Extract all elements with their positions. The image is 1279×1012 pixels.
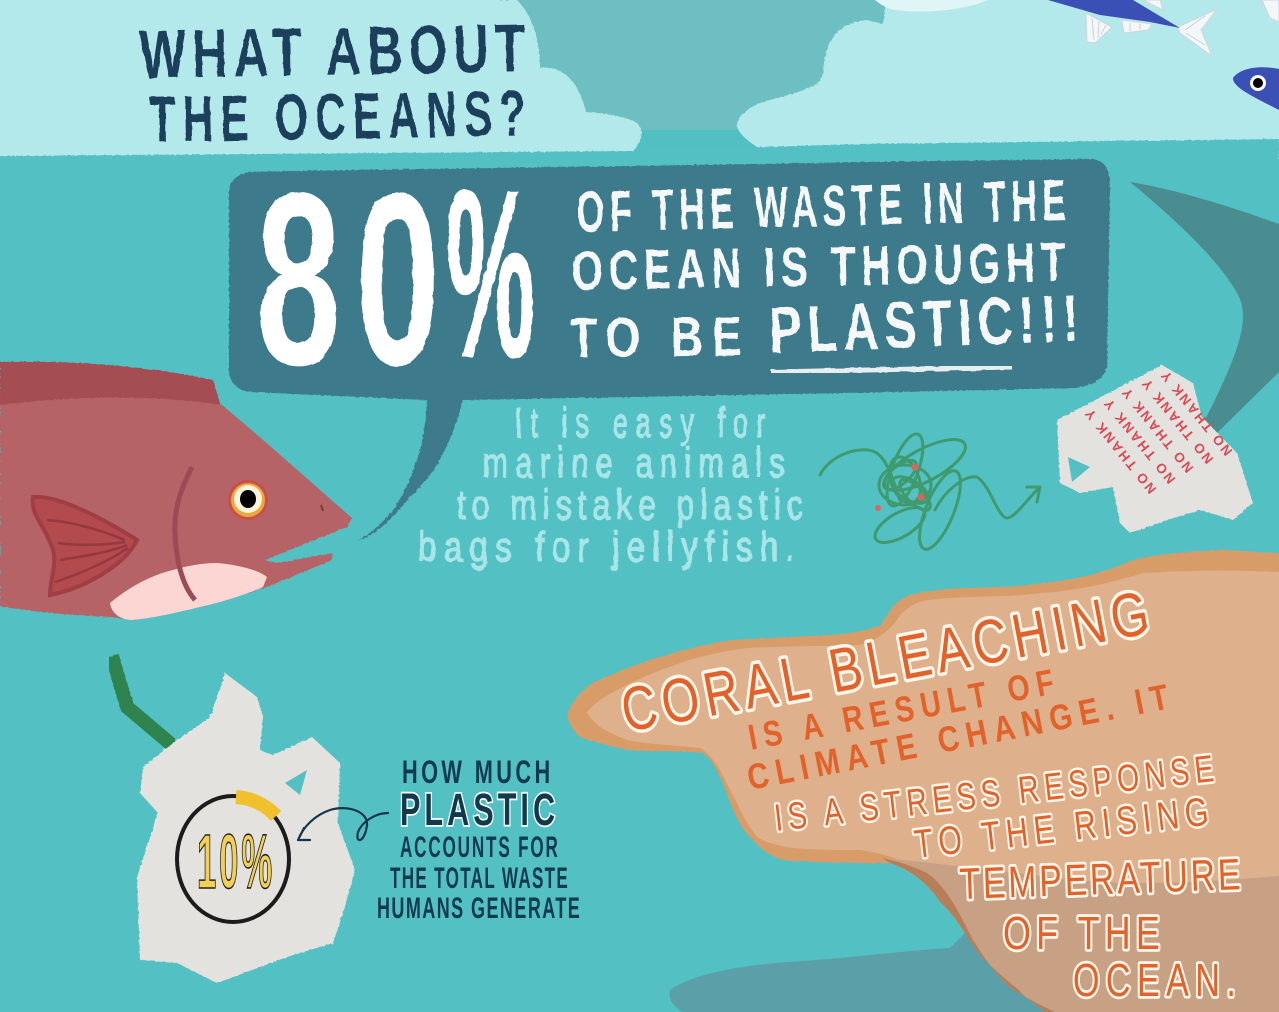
arrow to gauge [298,808,388,840]
gauge ring [177,796,289,922]
underline for plastic [771,367,1012,372]
speech bubble [229,159,1110,541]
icon: plastic bag with no thank you: NO THANK Y [1119,385,1196,476]
icon: plastic bag with no thank you: NO THANK Y [1158,368,1235,459]
caption: jellyfish [418,399,803,571]
icon: plastic bag with no thank you: NO THANK Y [1139,376,1216,467]
cloud: left [0,0,641,152]
bubble text: OF THE WASTE IN THE [576,168,1067,245]
title: THE OCEANS? [149,76,526,156]
fish: blue swimming fish top right [1048,0,1279,56]
bubble text: TO BE [570,305,742,369]
fish: red fish [0,362,352,620]
icon: plastic bag with no thank you [1057,365,1253,533]
coral heading: CORAL BLEACHING [616,578,1154,745]
sky background [0,0,1279,160]
icon: plastic bag with 10% gauge [137,673,355,983]
coral text: TO THE RISING [912,789,1211,867]
caption: jellyfish: to mistake plastic [457,481,803,528]
caption: jellyfish: bags for jellyfish. [418,525,795,571]
cloud: right [737,0,1279,150]
bubble text [570,168,1080,369]
coral text: IS A RESULT OF [745,662,1057,758]
coral text: IS A STRESS RESPONSE [772,748,1216,840]
icon: plastic bag with no thank you: NO THANK Y [1082,406,1159,497]
text: how much plastic: ACCOUNTS FOR [400,831,558,864]
gauge yellow segment [236,797,276,816]
fish eye [228,480,268,520]
fish fin [33,497,137,595]
bag handle strap [112,656,172,745]
caption: jellyfish: It is easy for [515,399,765,446]
coral text: CLIMATE CHANGE. IT [744,676,1172,798]
icon: plastic bag with no thank you: NO THANK Y [1101,396,1178,487]
text: how much plastic: HOW MUCH [402,754,550,790]
text: how much plastic [377,754,580,925]
bubble text: PLASTIC!!! [768,281,1080,368]
title [139,9,526,156]
fish gill line [175,467,195,600]
bubble text: OCEAN IS THOUGHT [571,232,1066,303]
stat: 80% [256,141,535,417]
text: how much plastic: THE TOTAL WASTE [390,862,568,895]
sea floor shadow [670,930,1060,1012]
stat: 80%: 80 [256,143,440,417]
boomerang shadow at right [1130,182,1279,433]
text: how much plastic: HUMANS GENERATE [377,893,580,925]
coral text [616,578,1241,1006]
icon: green scribble with arrow [820,430,1040,554]
coral text: OF THE [1003,908,1160,959]
caption: jellyfish: marine animals [483,439,785,486]
title: WHAT ABOUT [139,9,525,93]
text: how much plastic: PLASTIC [400,785,555,836]
panel: coral reef [567,550,1279,1012]
coral text: TEMPERATURE [959,850,1241,909]
scribble red dots [875,464,924,511]
moon [875,0,988,12]
fish belly [110,563,267,620]
gauge value: 10% [197,818,272,905]
stat: 80%: % [446,141,535,407]
fish: blue fish at right edge [1233,67,1279,110]
coral text: OCEAN. [1073,954,1236,1006]
